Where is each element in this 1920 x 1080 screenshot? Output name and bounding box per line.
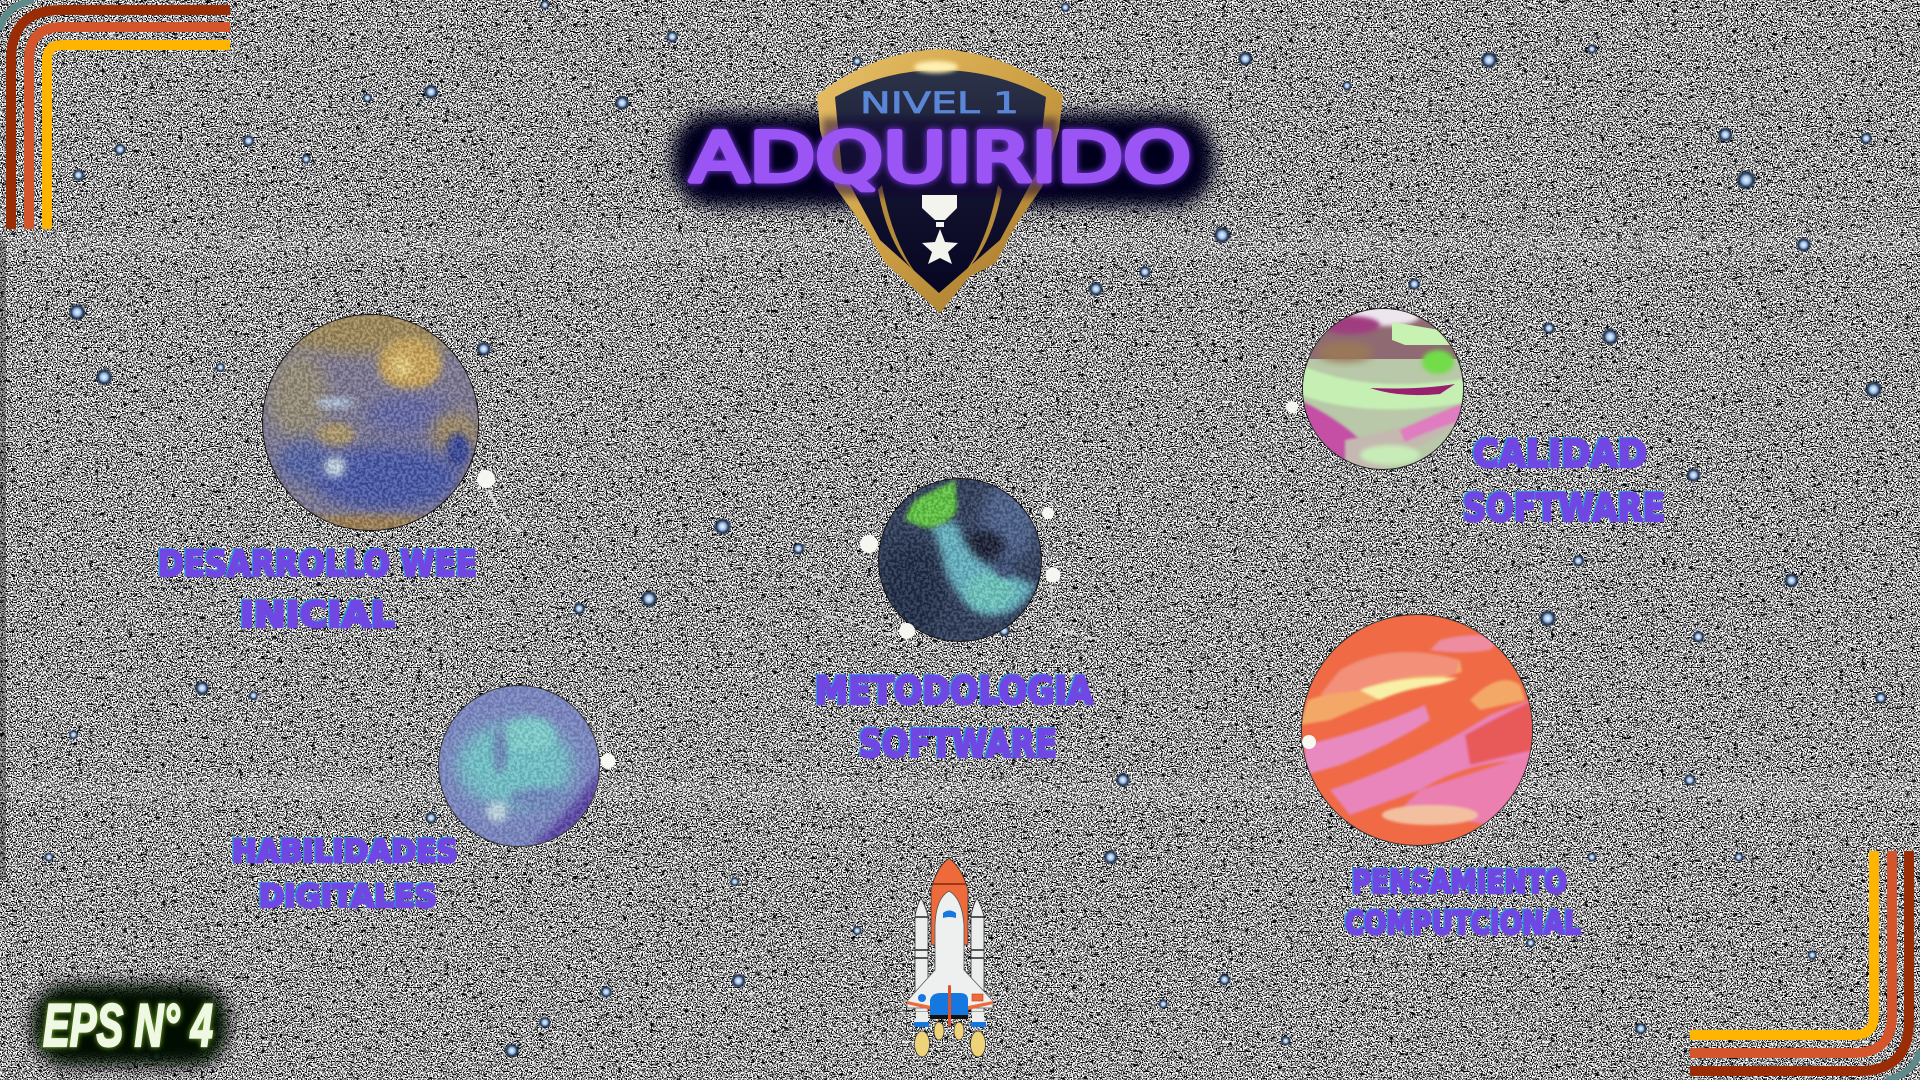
planet: metodologia software: [800, 462, 1098, 642]
moon: [600, 754, 616, 768]
label: pensamiento computacional: COMPUTCIONAL: [1345, 904, 1581, 942]
corner lines: top left: [0, 0, 230, 229]
text: EPS N° 4: [43, 992, 213, 1059]
moon: [1286, 401, 1298, 413]
planet: desarrollo web: [260, 302, 520, 533]
planet: pensamiento computacional: [1300, 612, 1534, 848]
label: desarrollo web inicial: INICIAL: [240, 595, 395, 636]
label: pensamiento computacional: PENSAMIENTO: [1352, 863, 1567, 901]
heading: nivel 1: NIVEL 1: [860, 86, 1019, 120]
label: metodologia software: [815, 669, 1094, 766]
label: pensamiento computacional: [1345, 863, 1581, 942]
label: desarrollo web inicial: DESARROLLO WEE: [158, 544, 477, 585]
label: habilidades digitales: [232, 834, 458, 915]
label: habilidades digitales: DIGITALES: [259, 879, 437, 915]
shield inner shade behind the title: [822, 118, 1058, 196]
moon: [1302, 735, 1316, 749]
label: metodologia software: METODOLOGIA: [815, 669, 1094, 713]
moon: [477, 470, 495, 488]
shield: [817, 49, 1063, 313]
label: desarrollo web inicial: [158, 544, 477, 636]
label: calidad software: CALIDAD: [1473, 432, 1647, 476]
icon: rocket: [907, 858, 993, 1057]
corner lines: bottom right: [1690, 851, 1920, 1080]
orbit: [602, 698, 625, 750]
title badge: [672, 49, 1214, 313]
orbit: [489, 490, 520, 531]
label: metodologia software: SOFTWARE: [859, 722, 1057, 766]
label: calidad software: [1463, 432, 1665, 530]
label: habilidades digitales: HABILIDADES: [232, 834, 458, 870]
planet: calidad software: [1286, 306, 1470, 475]
external tank: [931, 858, 968, 945]
icon: medal: [922, 195, 958, 264]
orbiter: [907, 891, 993, 1015]
orbits: [800, 462, 1098, 639]
heading: adquirido: ADQUIRIDO: [690, 119, 1191, 198]
planet: habilidades digitales: [438, 685, 625, 850]
boosters: [914, 898, 986, 1027]
moons: [860, 507, 1060, 639]
badge: eps no 4: [32, 984, 228, 1066]
title dark glow banner: [672, 113, 1214, 207]
label: calidad software: SOFTWARE: [1463, 486, 1665, 530]
dark glow: [32, 984, 228, 1066]
flames: [914, 1022, 986, 1057]
